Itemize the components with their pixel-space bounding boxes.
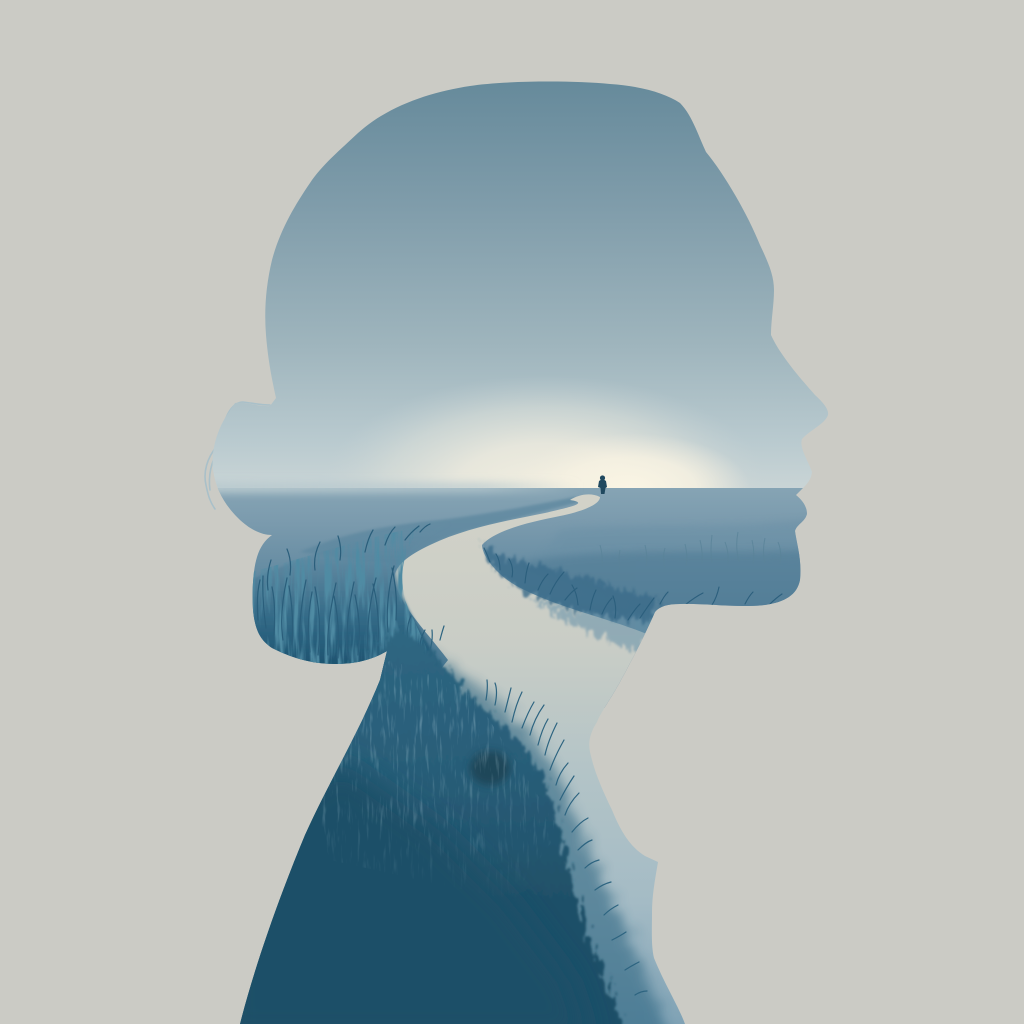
solid lower body (240, 753, 428, 1024)
sky (190, 70, 850, 490)
meadow edge grass (482, 545, 782, 620)
road shading under the meadow (530, 598, 660, 655)
illustration: double exposure head silhouette (204, 82, 828, 1024)
grass blades (257, 524, 430, 658)
dark grass mass (225, 628, 625, 1024)
horizon glow (372, 388, 712, 488)
winding path (395, 494, 700, 1024)
dark patch (470, 751, 510, 785)
grass mass (252, 556, 438, 717)
left field grass strip (300, 497, 580, 565)
grass blades (484, 548, 782, 620)
neck and body grass (225, 626, 670, 1024)
bright horizon core (572, 442, 736, 488)
left bank grass (252, 524, 438, 717)
far fields (218, 488, 807, 708)
silhouette scene (190, 70, 850, 1024)
hair wisps (205, 402, 270, 509)
grass texture (252, 527, 426, 668)
walking figure (598, 475, 607, 494)
right meadow bands (528, 524, 800, 610)
soft grass fringe (436, 646, 670, 1024)
grass band (482, 545, 660, 620)
left horizon mist (190, 482, 580, 493)
light grass strokes (322, 661, 554, 873)
edge blades (430, 626, 647, 995)
